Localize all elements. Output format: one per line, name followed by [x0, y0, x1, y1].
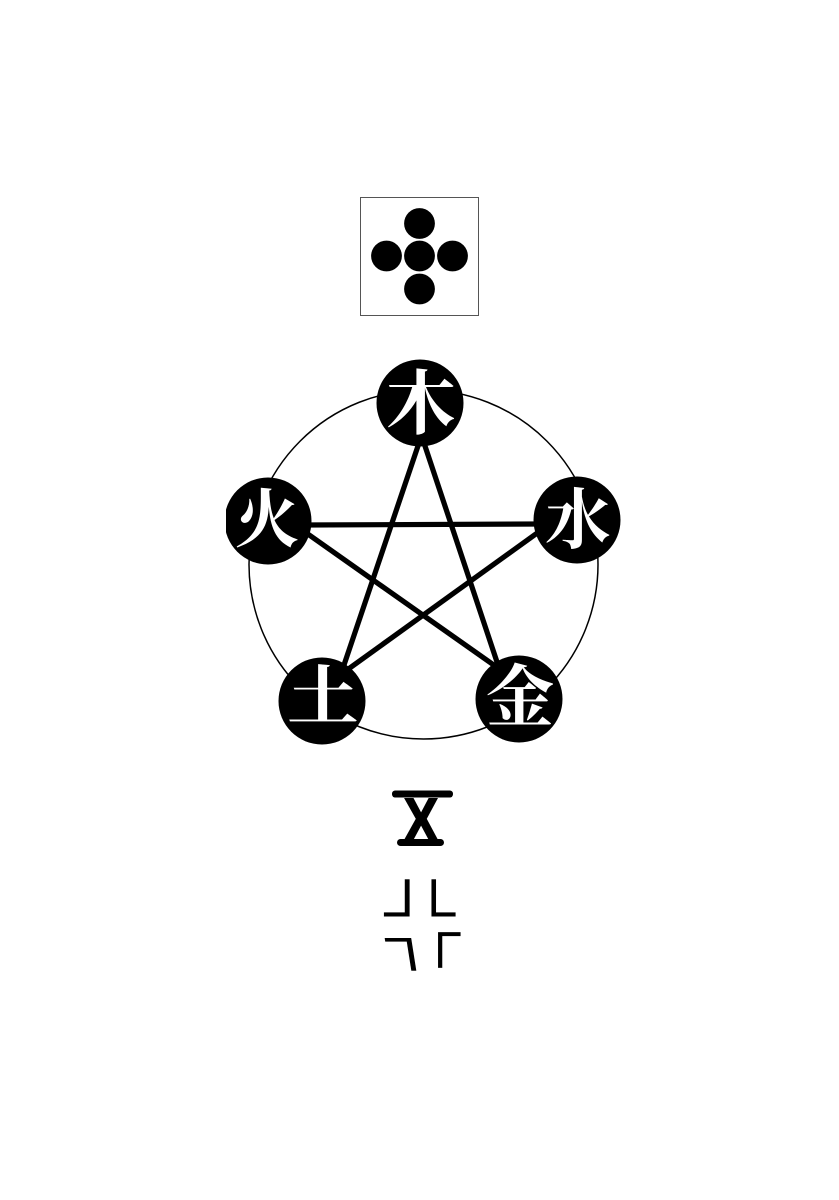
glyph group: corner marks — [379, 878, 462, 971]
node: metal — [476, 656, 562, 742]
corner mark: lower right: ┘ — [383, 878, 430, 950]
node: metal: 金 — [486, 660, 554, 736]
node: fire — [224, 478, 312, 564]
diagram: five elements pentagram — [220, 360, 620, 744]
icon: hourglass mark — [392, 786, 453, 854]
node: earth: 土 — [287, 662, 359, 733]
node: water: 水 — [545, 485, 611, 558]
corner mark: upper right: ┐ — [379, 909, 438, 971]
pentagram lines — [305, 440, 540, 670]
panel: five dots in square — [360, 198, 478, 316]
node: water — [534, 476, 620, 564]
node: wood: 木 — [386, 367, 456, 444]
node: fire: 火 — [235, 485, 299, 556]
icon: hourglass mark: X — [404, 786, 439, 854]
corner mark: lower left: └ — [412, 878, 457, 949]
corner mark: upper left: ┌ — [420, 901, 462, 969]
outer ring — [249, 390, 598, 739]
left edge crop — [220, 490, 226, 550]
node: earth — [278, 658, 366, 744]
